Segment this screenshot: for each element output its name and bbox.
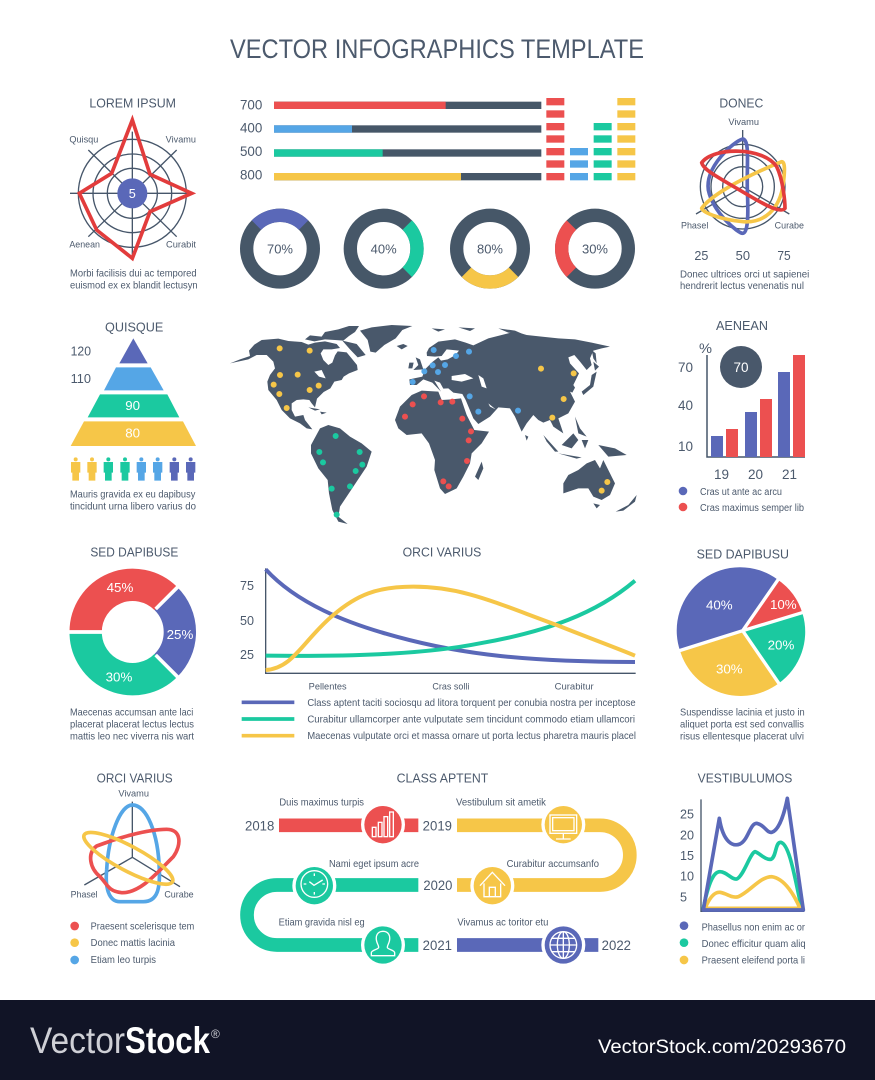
- caption: [680, 269, 809, 292]
- caption: [70, 708, 194, 742]
- heading: AENEAN: [716, 318, 768, 333]
- legend: Praesent scelerisque tem: [91, 921, 194, 932]
- panel: donec radar: [680, 95, 809, 292]
- radar labels: Phasel: [71, 889, 98, 899]
- axes: [701, 799, 804, 911]
- green markers: [317, 433, 365, 517]
- year labels: 2022: [602, 938, 631, 953]
- footer band: [0, 1000, 875, 1080]
- axis labels: 70: [678, 360, 693, 375]
- footer logo: Stock: [125, 1020, 210, 1061]
- legend: Donec mattis lacinia: [91, 938, 176, 949]
- radar labels: Vivamu: [118, 789, 149, 799]
- scale values: [694, 248, 791, 263]
- donut: 40%: 40%: [371, 241, 397, 256]
- axis labels: 21: [782, 467, 797, 482]
- legend: Curabitur ullamcorper ante vulputate sem tincidunt commodo etiam ullamcori: [307, 715, 635, 726]
- y axis labels: 25: [680, 806, 694, 821]
- caption: risus ellentesque placerat ulvi: [680, 731, 804, 742]
- caption: placerat placerat lectus lectus: [70, 720, 194, 731]
- bars: [711, 355, 805, 457]
- axis labels: %: [699, 341, 712, 356]
- axis labels: 20: [748, 467, 763, 482]
- heading: LOREM IPSUM: [89, 96, 176, 111]
- donut: 80%: 80%: [477, 241, 503, 256]
- center value: 5: [129, 187, 136, 201]
- milestone labels: Duis maximus turpis: [279, 798, 364, 809]
- donut: 80%: [457, 215, 523, 282]
- title: VECTOR INFOGRAPHICS TEMPLATE: [230, 34, 644, 64]
- radar labels: Quisqu: [69, 135, 98, 145]
- donut labels: 25%: [167, 627, 193, 642]
- legend: Praesent eleifend porta li: [702, 955, 805, 966]
- bar labels: 500: [240, 143, 263, 159]
- caption: mattis leo nec viverra nis wart: [70, 731, 194, 742]
- caption: Morbi facilisis dui ac tempored: [70, 269, 197, 280]
- heading: ORCI VARIUS: [403, 545, 482, 560]
- donut: 30%: [562, 215, 628, 282]
- legend: Cras ut ante ac arcu: [700, 487, 782, 498]
- heading: VESTIBULUMOS: [698, 771, 793, 786]
- y axis labels: 50: [240, 613, 254, 628]
- value badge: 70: [733, 360, 749, 375]
- y axis labels: 75: [240, 578, 254, 593]
- radar labels: Curabe: [164, 889, 194, 899]
- y axis labels: 25: [240, 647, 254, 662]
- icon: person: [361, 923, 405, 967]
- heading: CLASS APTENT: [397, 771, 488, 786]
- legend: Maecenas vulputate orci et massa ornare ut porta lectus pharetra mauris placel: [307, 731, 636, 742]
- legend: Class aptent taciti sociosqu ad litora torquent per conubia nostra per inceptose: [307, 698, 636, 709]
- heading: QUISQUE: [105, 320, 164, 335]
- caption: euismod ex ex blandit lectusyn: [70, 280, 198, 291]
- radar labels: Aenean: [69, 240, 100, 250]
- legend: [242, 698, 636, 742]
- x axis labels: [309, 682, 594, 692]
- seas and lakes cut-outs: [314, 370, 496, 409]
- caption: Donec ultrices orci ut sapienei: [680, 269, 809, 280]
- pyramid labels: 110: [71, 371, 91, 386]
- axis labels: 10: [678, 439, 693, 454]
- radar labels: [71, 789, 194, 899]
- panel: lorem ipsum radar: [69, 96, 198, 291]
- panel: sed dapibusu pie: [677, 546, 805, 742]
- red markers: [402, 394, 474, 489]
- legend: [680, 921, 806, 966]
- footer logo: ®: [211, 1027, 220, 1041]
- scale values: 25: [694, 248, 708, 263]
- radar labels: Vivamu: [728, 117, 759, 127]
- icon: house: [470, 864, 514, 908]
- bar labels: 800: [240, 167, 263, 183]
- bar labels: 400: [240, 120, 263, 136]
- yellow markers: [271, 346, 610, 493]
- radar labels: [681, 117, 804, 230]
- milestone labels: Etiam gravida nisl eg: [279, 918, 365, 929]
- pyramid labels: [71, 344, 91, 386]
- radar labels: Vivamu: [166, 135, 196, 145]
- year labels: 2021: [423, 938, 452, 953]
- footer logo: Vector: [30, 1020, 125, 1061]
- caption: [70, 269, 198, 291]
- caption: Mauris gravida ex eu dapibusy: [70, 490, 195, 501]
- center value: [117, 178, 147, 208]
- bar labels: 700: [240, 96, 263, 112]
- caption: Maecenas accumsan ante laci: [70, 708, 193, 719]
- world map: [230, 325, 637, 524]
- caption: [70, 490, 196, 512]
- value badge: [720, 346, 762, 388]
- panel: vestibulumos area chart: [680, 771, 806, 966]
- pie labels: 10%: [770, 597, 797, 612]
- year labels: 2020: [423, 878, 453, 893]
- legend: [679, 487, 804, 514]
- pyramid layers: 80: [125, 426, 140, 441]
- radar grid: [696, 130, 789, 229]
- pie labels: 30%: [716, 661, 743, 676]
- panel: sed dapibuse donut: [67, 545, 194, 742]
- legend: Phasellus non enim ac or: [702, 922, 806, 933]
- icon: monitor: [541, 803, 585, 847]
- bar labels: [240, 96, 263, 183]
- legend: Etiam leo turpis: [91, 955, 156, 966]
- panel: quisque pyramid: [70, 320, 196, 512]
- donut: 70%: 70%: [267, 241, 293, 256]
- axis labels: 40: [678, 398, 693, 413]
- radar labels: Curabit: [166, 240, 196, 250]
- panel: class aptent timeline: [245, 771, 631, 967]
- y axis labels: 15: [680, 848, 694, 863]
- axes: [707, 355, 805, 457]
- radar spokes: [84, 802, 180, 887]
- year labels: 2018: [245, 818, 274, 833]
- heading: SED DAPIBUSE: [90, 545, 179, 560]
- pie chart: [677, 567, 805, 696]
- caption: aliquet porta est sed convallis: [680, 720, 804, 731]
- milestone labels: Vivamus ac toritor etu: [457, 918, 548, 929]
- caption: [680, 708, 805, 742]
- scale values: 75: [777, 248, 791, 263]
- radar labels: Curabe: [775, 220, 804, 230]
- pie labels: 20%: [768, 638, 794, 653]
- donut chart: [67, 585, 180, 679]
- y axis labels: 20: [680, 827, 694, 842]
- donut: 70%: [247, 215, 313, 282]
- caption: tincidunt urna libero varius do: [70, 501, 196, 512]
- x axis labels: Pellentes: [309, 682, 347, 692]
- year labels: [245, 818, 631, 953]
- y axis labels: 5: [680, 890, 687, 905]
- radar labels: [69, 135, 196, 250]
- heading: DONEC: [719, 95, 763, 110]
- donut labels: [106, 580, 193, 684]
- pyramid layers: [71, 338, 196, 446]
- series curves: [78, 805, 179, 902]
- people icons: [71, 457, 195, 481]
- milestone labels: Nami eget ipsum acre: [329, 859, 419, 870]
- radar star outline: [79, 120, 192, 258]
- y axis labels: 10: [680, 868, 694, 883]
- panel: orci varius radar: [70, 771, 194, 966]
- timeline tracks: [247, 825, 630, 945]
- x axis labels: Curabitur: [555, 682, 594, 692]
- donut labels: 30%: [106, 669, 132, 684]
- pie labels: [706, 597, 797, 676]
- heading: ORCI VARIUS: [97, 771, 173, 786]
- footer logo: [30, 1020, 220, 1061]
- series curves: [702, 139, 785, 233]
- panel: aenean bar chart: [678, 318, 805, 514]
- axes: [266, 568, 636, 673]
- line series: [266, 569, 635, 670]
- pyramid layers: 90: [125, 398, 140, 413]
- donut labels: 45%: [107, 580, 133, 595]
- icon: bar chart: [361, 803, 405, 847]
- axis labels: 19: [714, 467, 729, 482]
- legend: Donec efficitur quam aliq: [702, 939, 806, 950]
- year labels: 2019: [423, 818, 452, 833]
- land masses: [230, 325, 637, 524]
- y axis labels: [680, 806, 694, 905]
- panel: orci varius line chart: [240, 545, 636, 742]
- milestone labels: Curabitur accumsanfo: [507, 859, 599, 870]
- milestone labels: Vestibulum sit ametik: [456, 798, 546, 809]
- caption: Suspendisse lacinia et justo in: [680, 708, 805, 719]
- panel: horizontal bars and equalizer: [240, 96, 635, 282]
- footer image id: VectorStock.com/20293670: [598, 1037, 846, 1058]
- radar grid: [70, 132, 193, 255]
- progress bars: [274, 102, 541, 180]
- caption: hendrerit lectus venenatis nul: [680, 281, 804, 292]
- blue markers: [410, 347, 521, 414]
- icon: clock: [292, 864, 336, 908]
- equalizer blocks: [546, 98, 635, 180]
- heading: SED DAPIBUSU: [697, 546, 789, 561]
- legend: [70, 921, 194, 966]
- icon: globe: [541, 923, 585, 967]
- donut: 30%: 30%: [582, 241, 608, 256]
- radar labels: Phasel: [681, 220, 708, 230]
- x axis labels: Cras solli: [432, 682, 469, 692]
- axis labels: [678, 341, 797, 482]
- pyramid labels: 120: [71, 344, 91, 359]
- donut: 40%: [350, 215, 417, 282]
- milestone labels: [279, 798, 599, 929]
- legend: Cras maximus semper lib: [700, 503, 804, 514]
- series outlines: [703, 798, 803, 910]
- scale values: 50: [736, 248, 750, 263]
- pie labels: 40%: [706, 598, 733, 613]
- y axis labels: [240, 578, 254, 662]
